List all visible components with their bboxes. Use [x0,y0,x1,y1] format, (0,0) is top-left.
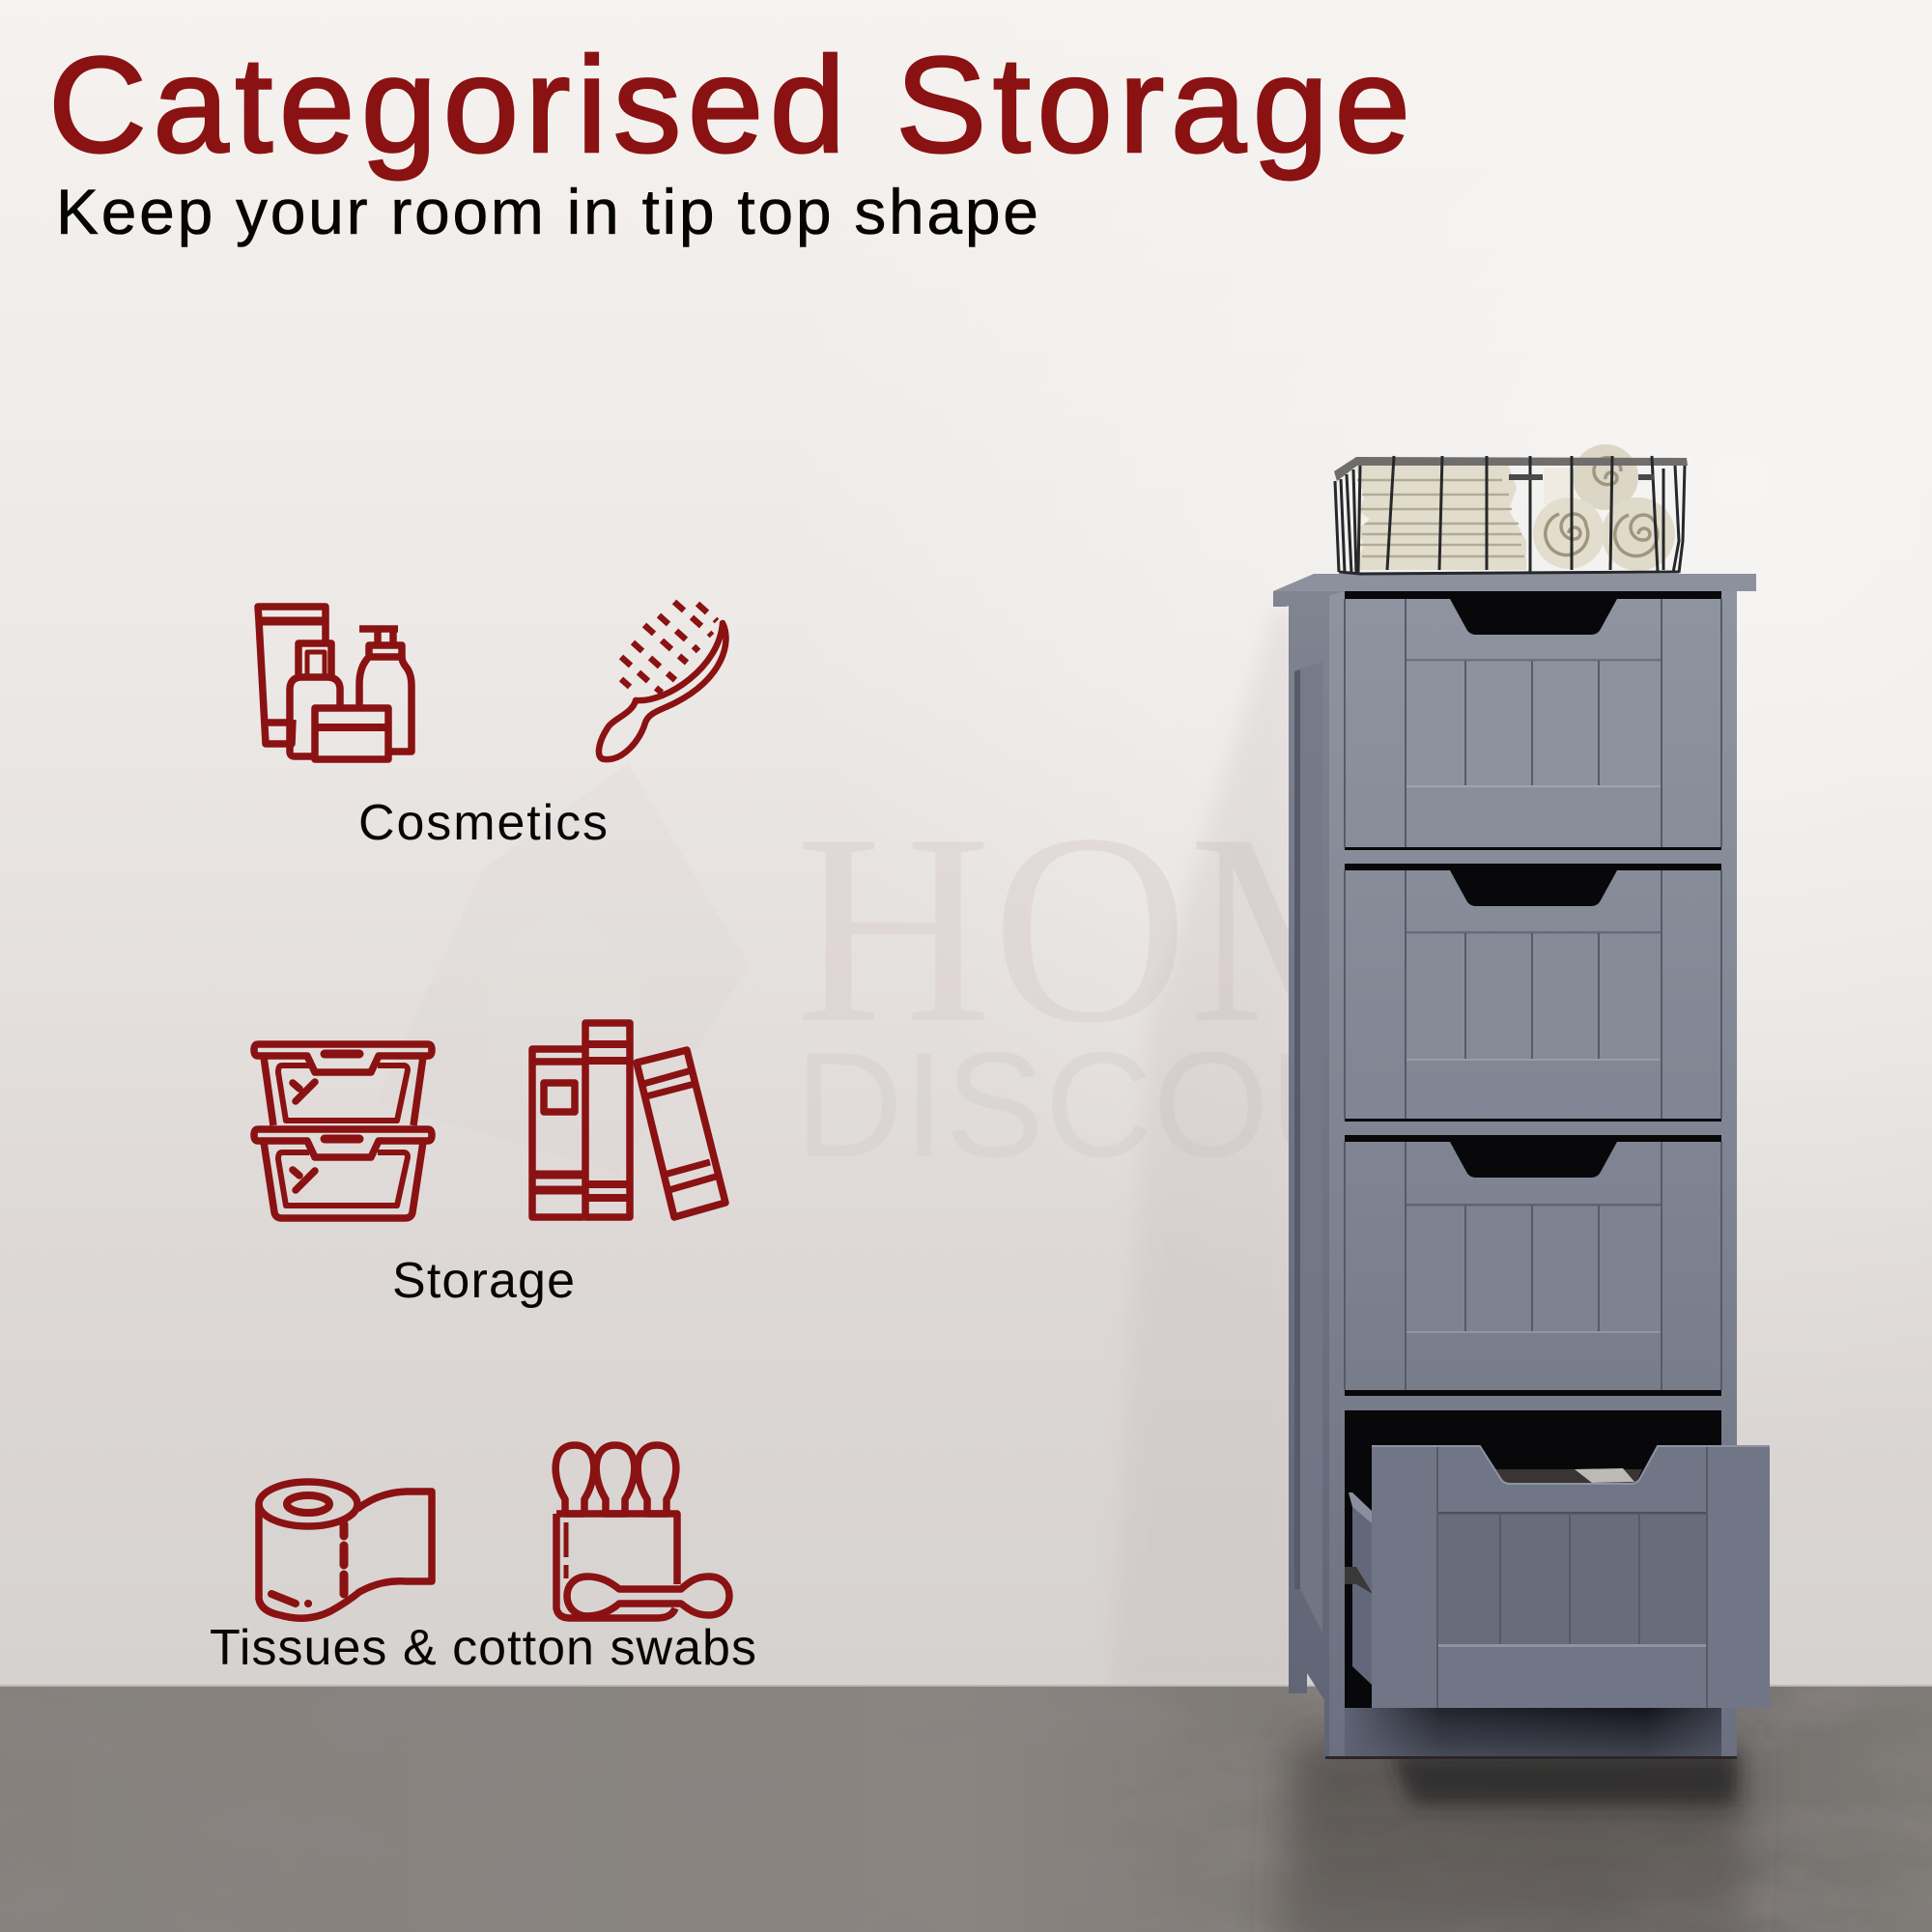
label: Tissues & cotton swabs: Tissues & cotton swabs [210,1620,756,1676]
open drawer contents [1495,1469,1642,1483]
drawer 2 [1345,870,1721,1119]
icon: tissue roll [259,1482,432,1618]
open drawer side [1345,1492,1373,1686]
cabinet [1273,574,1770,1756]
icon: cosmetics bottles [258,607,412,759]
icon: cotton swabs in cup [555,1445,729,1618]
toe board [1345,1708,1721,1756]
wire basket [1334,456,1688,574]
towel basket [1334,444,1688,574]
title: Categorised Storage [48,28,1410,181]
faint watermark logo: DISCOUNT [795,1021,1577,1188]
label: Storage: Storage [392,1253,575,1309]
cabinet side panel [1289,589,1345,1756]
faint watermark logo: HOME [795,778,1597,1079]
subtitle: Keep your room in tip top shape [56,176,1038,247]
dark interior [1345,591,1721,1731]
icon: stacked food containers [254,1044,432,1218]
cabinet carcass front [1721,591,1737,1756]
faint watermark logo [377,763,1597,1188]
floor [0,1685,1932,1932]
open drawer front [1372,1446,1770,1708]
cabinet top board [1273,574,1756,607]
wall shadow beside cabinet [1111,609,1299,1690]
rolled towels [1533,444,1675,571]
drawer 3 [1345,1142,1721,1390]
folded towels [1350,462,1526,570]
icon: hairbrush [599,602,726,759]
floor shadow under cabinet [1275,1739,1747,1932]
icon: books [532,1023,725,1217]
cabinet shelves [1345,850,1721,1410]
drawer 1 [1345,599,1721,847]
label: Cosmetics: Cosmetics [358,795,608,851]
